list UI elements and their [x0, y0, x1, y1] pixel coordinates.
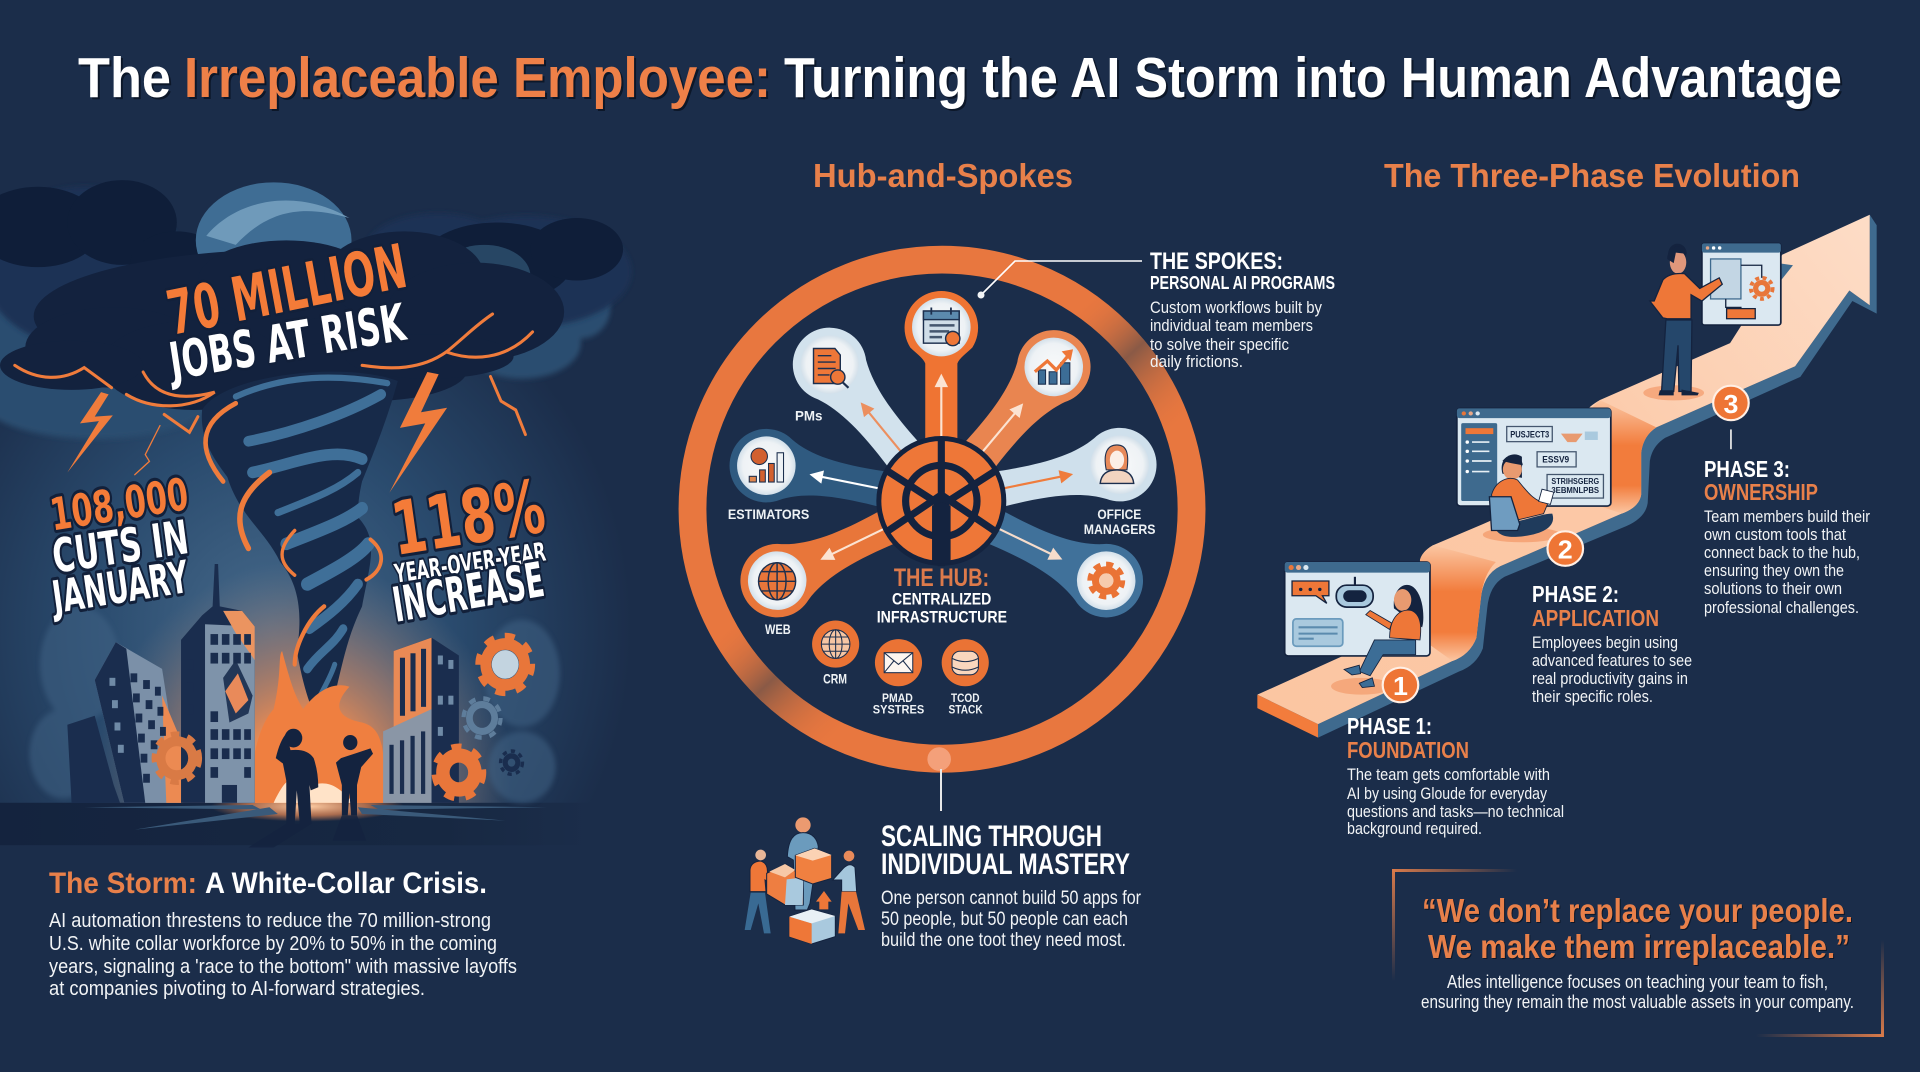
badge: 3: [1713, 386, 1749, 420]
callout: the spokes: THE SPOKES:: [1150, 248, 1283, 275]
stat: 108,000 cuts in january: [47, 469, 192, 625]
title: The: [78, 46, 171, 110]
text block: scaling through individual mastery: [881, 820, 1142, 951]
chart: hub and spokes wheel: [692, 260, 1192, 771]
text block: scaling through individual mastery: One person cannot build 50 apps for: [881, 888, 1142, 909]
spoke: estimators: [723, 422, 887, 525]
stat: 108,000 cuts in january: CUTS IN: [49, 510, 192, 584]
storm heading: The Storm:: [49, 867, 197, 900]
text block: phase 3: Team members build their: [1704, 508, 1870, 526]
text block: phase 2: their specific roles.: [1532, 688, 1653, 706]
spoke: top: [905, 291, 978, 440]
badge: 2: [1547, 531, 1583, 566]
icon: gear: [1090, 564, 1123, 597]
stat: 108,000 cuts in january: 108,000: [47, 469, 192, 542]
badge: 1: 1: [1393, 671, 1408, 701]
stat: 118% year-over-year increase: [386, 464, 550, 634]
icon: CRM globe: [812, 621, 859, 668]
icon: mail: [875, 639, 922, 686]
connector from ring to scaling block: [940, 769, 942, 811]
gears: [154, 636, 532, 798]
title: Irreplaceable Employee:: [184, 46, 771, 110]
text block: phase 1: FOUNDATION: [1347, 737, 1469, 763]
icon: team building blocks: [745, 817, 865, 944]
stat: 70 million jobs at risk: JOBS AT RISK: [164, 292, 411, 392]
callout: the spokes: to solve their specific: [1150, 335, 1289, 354]
icon: growth chart: [1035, 349, 1073, 384]
spoke labels: PMAD: [882, 691, 913, 705]
spoke labels: MANAGERS: [1084, 522, 1156, 537]
icon: calendar: [923, 307, 960, 346]
text block: phase 3: professional challenges.: [1704, 599, 1859, 617]
text block: phase 2: advanced features to see: [1532, 652, 1692, 670]
text block: phase 3: connect back to the hub,: [1704, 544, 1860, 562]
quote subtext: Atles intelligence focuses on teaching your team to fish,: [1447, 972, 1828, 992]
spoke: office managers: [995, 421, 1163, 525]
central hub emblem: [876, 436, 1006, 566]
spoke: charts: [952, 315, 1106, 478]
spoke labels: [728, 409, 1156, 716]
stat: 118% year-over-year increase: YEAR-OVER-YEAR: [392, 537, 547, 589]
text block: phase 2: real productivity gains in: [1532, 670, 1688, 688]
stat: 118% year-over-year increase: 118%: [386, 464, 550, 572]
scene: phase 2 window and person: 3EBMNLPBS: [1551, 485, 1599, 495]
callout: the spokes: PERSONAL AI PROGRAMS: [1150, 273, 1335, 293]
outer ring: [692, 260, 1192, 771]
spoke labels: SYSTRES: [873, 702, 924, 716]
scene: phase 2 window and person: PUSJECT3: [1510, 429, 1549, 439]
badge: 3: 3: [1723, 389, 1738, 419]
spoke: web: [728, 495, 901, 630]
icon: estimator bars: [749, 448, 784, 482]
spoke labels: STACK: [948, 702, 983, 716]
text block: phase 1: AI by using Gloude for everyday: [1347, 785, 1548, 803]
text block: scaling through individual mastery: SCALING THROUGH: [881, 820, 1102, 853]
text block: phase 2: PHASE 2:: [1532, 581, 1619, 607]
panel: the storm illustration: [0, 180, 660, 847]
text block: phase 3: own custom tools that: [1704, 526, 1846, 544]
tornado funnel: [202, 372, 398, 734]
ground: [0, 791, 589, 845]
chart: rising staircase arrow: [1257, 215, 1877, 738]
text block: scaling through individual mastery: build the one toot they need most.: [881, 930, 1126, 951]
storm heading: A White-Collar Crisis.: [205, 867, 487, 900]
storm body: [49, 910, 517, 1000]
icon: office manager: [1100, 445, 1134, 483]
fire: [252, 651, 384, 803]
hub label: THE HUB:: [894, 564, 989, 592]
quote subtext: ensuring they remain the most valuable assets in your company.: [1421, 992, 1854, 1012]
text block: phase 1: questions and tasks—no technical: [1347, 803, 1564, 821]
text block: phase 3: solutions to their own: [1704, 580, 1842, 598]
callout: the spokes: [1150, 248, 1335, 371]
hub label: CENTRALIZED: [892, 589, 991, 608]
callout: the spokes: Custom workflows built by: [1150, 298, 1322, 317]
spoke labels: TCOD: [951, 691, 980, 705]
text block: phase 3: ensuring they own the: [1704, 562, 1844, 580]
stat: 70 million jobs at risk: [162, 231, 412, 392]
staircase top surface: [1257, 215, 1870, 724]
spoke: PMs: [778, 313, 931, 477]
quote subtext: [1421, 972, 1854, 1012]
callout: the spokes: individual team members: [1150, 316, 1313, 335]
text block: phase 2: APPLICATION: [1532, 605, 1659, 631]
icon: globe web: [759, 563, 796, 600]
text block: phase 1: [1347, 713, 1564, 838]
scene: phase 1 window and person: [1285, 562, 1430, 688]
text block: scaling through individual mastery: 50 people, but 50 people can each: [881, 909, 1128, 930]
spoke labels: OFFICE: [1097, 507, 1141, 522]
text block: phase 1: PHASE 1:: [1347, 713, 1432, 739]
badge: 2: 2: [1558, 535, 1573, 565]
scene: phase 2 window and person: STRIHSGERG: [1551, 476, 1599, 486]
spoke labels: ESTIMATORS: [728, 507, 809, 522]
quote text: “We don’t replace your people.: [1422, 892, 1853, 929]
icon: document: [814, 349, 848, 388]
text block: phase 2: Employees begin using: [1532, 634, 1678, 652]
silhouettes of two workers: [248, 729, 373, 847]
hub label: [877, 564, 1007, 627]
text block: phase 2: [1532, 581, 1692, 706]
callout leader line: [978, 261, 1142, 298]
storm heading: [49, 867, 487, 900]
scene: phase 2 window and person: ESSV9: [1542, 454, 1569, 465]
storm body: AI automation threstens to reduce the 70 million-strong: [49, 910, 491, 932]
storm body: years, signaling a 'race to the bottom" with massive layoffs: [49, 956, 517, 978]
text block: phase 1: The team gets comfortable with: [1347, 766, 1550, 784]
spoke: gear: [982, 495, 1155, 630]
scene: phase 2 window and person: [1457, 408, 1611, 537]
text block: phase 3: OWNERSHIP: [1704, 479, 1818, 505]
text block: phase 3: PHASE 3:: [1704, 456, 1790, 482]
text block: phase 3: [1704, 456, 1870, 617]
stat: 108,000 cuts in january: JANUARY: [47, 552, 192, 625]
storm body: at companies pivoting to AI-forward strategies.: [49, 978, 425, 1000]
icon: database: [942, 639, 989, 686]
quote text: We make them irreplaceable.”: [1428, 928, 1850, 965]
storm clouds: [0, 180, 632, 439]
quote text: [1422, 892, 1853, 965]
scene: phase 3 window and person: [1650, 243, 1793, 395]
heading: three-phase evolution: The Three-Phase Evolution: [1384, 157, 1800, 194]
storm body: U.S. white collar workforce by 20% to 50% in the coming: [49, 933, 497, 955]
callout: the spokes: daily frictions.: [1150, 352, 1243, 371]
text block: phase 1: background required.: [1347, 820, 1482, 838]
title: [78, 46, 1842, 110]
collapsing buildings: [67, 564, 459, 803]
spoke labels: PMs: [795, 409, 822, 424]
callout: quote panel: [1392, 869, 1884, 1037]
spoke labels: WEB: [765, 622, 791, 637]
badge: 1: [1383, 668, 1418, 702]
staircase side face: [1318, 215, 1877, 738]
stat: 118% year-over-year increase: INCREASE: [389, 553, 548, 634]
spoke labels: CRM: [823, 671, 847, 686]
hub label: INFRASTRUCTURE: [877, 608, 1007, 627]
stat: 70 million jobs at risk: 70 MILLION: [162, 231, 412, 350]
lightning bolts: [15, 314, 533, 493]
text block: the storm: [49, 867, 517, 1000]
text block: scaling through individual mastery: INDIVIDUAL MASTERY: [881, 848, 1130, 881]
heading: hub-and-spokes: Hub-and-Spokes: [813, 157, 1073, 194]
